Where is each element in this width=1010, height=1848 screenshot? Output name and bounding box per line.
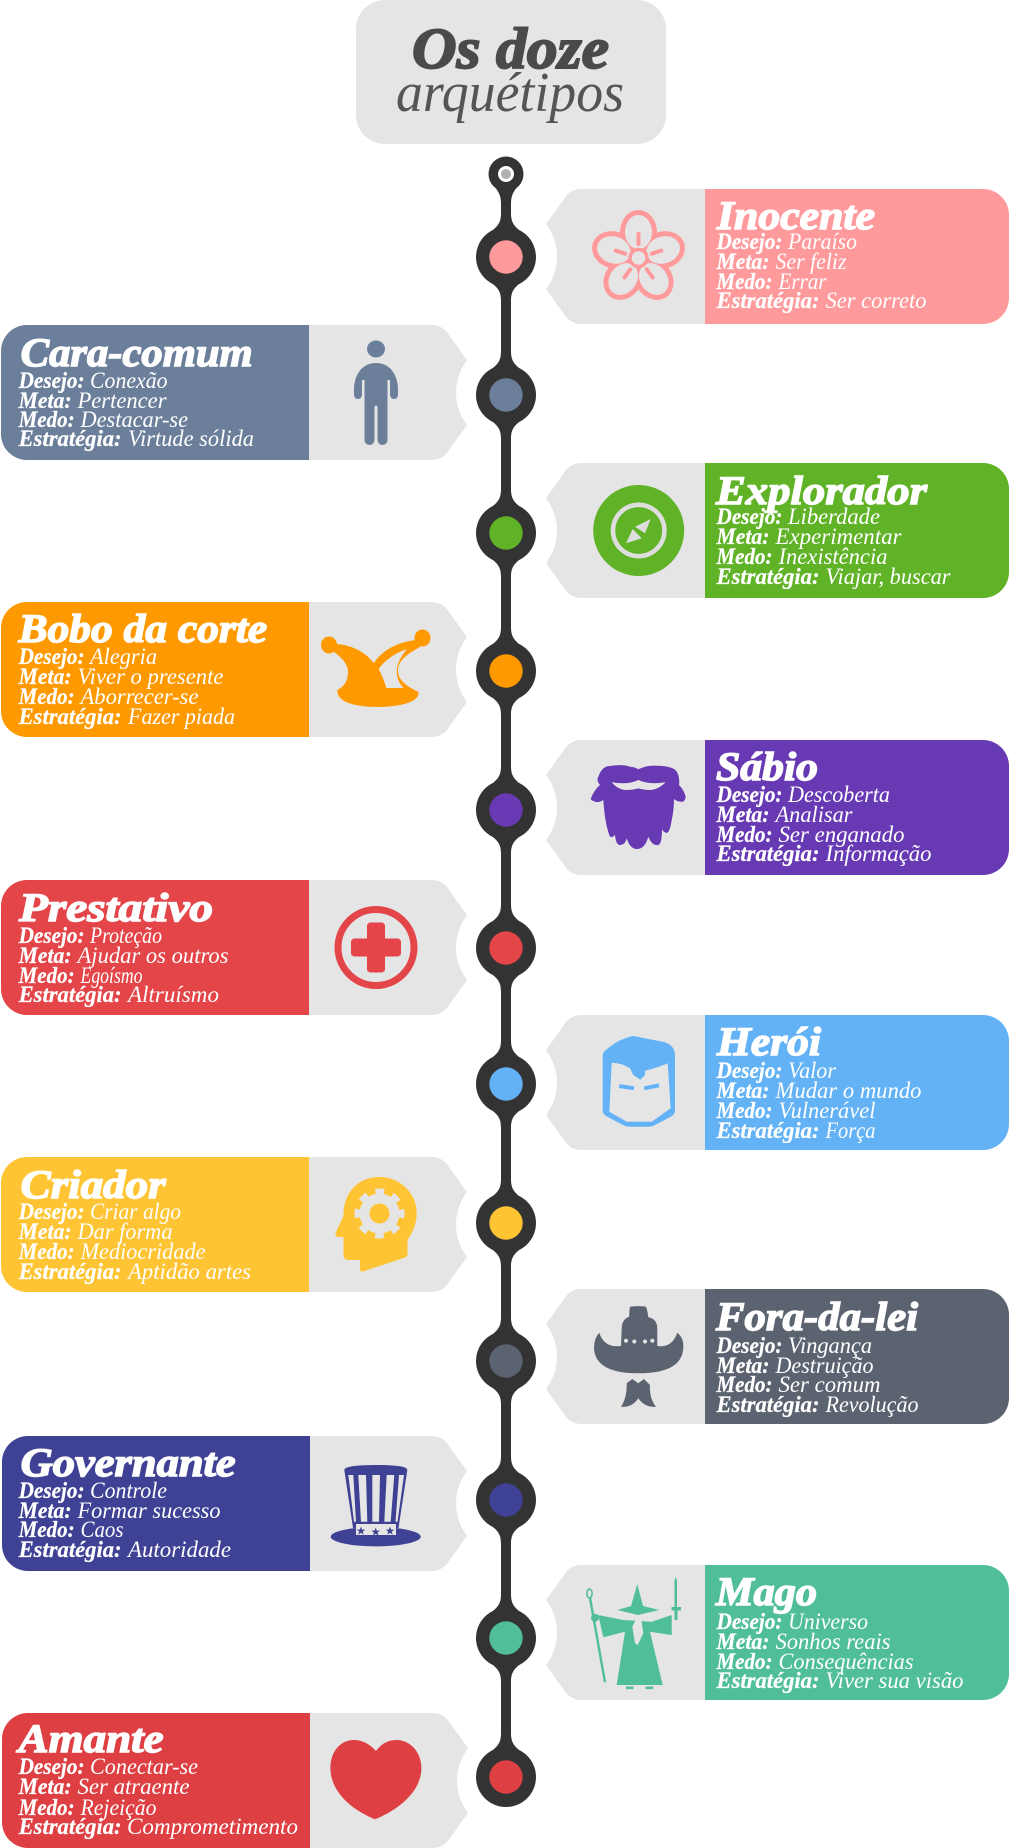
details: Prestativo: Meta: xyxy=(18,943,72,969)
details: Amante: Comprometimento xyxy=(127,1814,298,1840)
details: Inocente: Estratégia: xyxy=(716,288,820,314)
details: Criador: Dar forma xyxy=(77,1219,172,1245)
details: Amante: Rejeição xyxy=(80,1795,157,1821)
details: Amante: Meta: xyxy=(18,1774,72,1800)
details: Herói: Meta: xyxy=(716,1078,770,1104)
details: Governante: Autoridade xyxy=(126,1537,231,1563)
details: Fora-da-lei: Ser comum xyxy=(778,1372,880,1398)
heading: Governante: Governante xyxy=(21,1440,236,1485)
panel: Herói xyxy=(546,1015,1009,1150)
details: Fora-da-lei xyxy=(716,1333,919,1418)
details: Criador: Mediocridade xyxy=(80,1239,206,1265)
title xyxy=(356,0,666,144)
icon: head with gear xyxy=(335,1177,417,1272)
icon: medical cross xyxy=(338,910,414,986)
node: Sábio xyxy=(476,766,536,854)
details: Prestativo: Medo: xyxy=(18,963,75,989)
details: Bobo da corte: Alegria xyxy=(88,644,157,670)
title: arquétipos xyxy=(396,62,624,124)
node: Prestativo xyxy=(476,904,536,992)
details: Prestativo: Ajudar os outros xyxy=(76,943,228,969)
panel: Bobo da corte xyxy=(1,602,467,737)
details: Fora-da-lei: Desejo: xyxy=(716,1333,782,1359)
icon: top hat xyxy=(331,1465,421,1546)
details: Sábio: Meta: xyxy=(716,802,770,828)
details: Herói: Vulnerável xyxy=(778,1098,876,1124)
details: Criador: Estratégia: xyxy=(18,1259,122,1285)
heading: Amante: Amante xyxy=(15,1716,164,1761)
details: Sábio: Estratégia: xyxy=(716,841,820,867)
panel: Governante xyxy=(2,1436,467,1571)
details: Herói xyxy=(716,1058,922,1144)
details: Mago: Medo: xyxy=(716,1649,772,1675)
details: Inocente: Desejo: xyxy=(716,229,782,255)
details: Criador: Criar algo xyxy=(90,1199,181,1225)
details: Bobo da corte: Desejo: xyxy=(18,644,85,670)
details: Criador: Desejo: xyxy=(18,1199,85,1225)
node: Herói xyxy=(476,1040,536,1128)
details: Explorador: Experimentar xyxy=(775,524,902,550)
details: Explorador: Inexistência xyxy=(778,544,888,570)
details: Sábio xyxy=(716,782,932,867)
details: Mago: Estratégia: xyxy=(716,1668,820,1694)
details: Fora-da-lei: Destruição xyxy=(775,1353,874,1379)
heading: Sábio: Sábio xyxy=(716,744,818,789)
details: Mago: Viver sua visão xyxy=(826,1668,964,1694)
details: Sábio: Medo: xyxy=(716,822,772,848)
panel: Mago xyxy=(546,1565,1009,1700)
details: Amante: Desejo: xyxy=(18,1754,85,1780)
details: Sábio: Desejo: xyxy=(716,782,782,808)
details: Governante: Medo: xyxy=(18,1517,75,1543)
details: Inocente: Paraíso xyxy=(787,229,857,255)
node: Cara-comum xyxy=(476,351,536,439)
heading: Criador: Criador xyxy=(21,1162,166,1207)
details: Explorador: Meta: xyxy=(716,524,770,550)
details: Prestativo: Proteção xyxy=(89,923,162,949)
details: Bobo da corte: Estratégia: xyxy=(18,704,122,730)
icon: flower xyxy=(587,210,690,308)
panel: Explorador xyxy=(546,463,1009,598)
details: Fora-da-lei: Estratégia: xyxy=(716,1392,820,1418)
details: Prestativo: Estratégia: xyxy=(18,982,122,1008)
icon: jester hat xyxy=(321,630,430,707)
heading: Bobo da corte: Bobo da corte xyxy=(18,606,267,651)
details: Herói: Força xyxy=(825,1118,876,1144)
panel: Fora-da-lei xyxy=(546,1289,1009,1424)
details: Herói: Mudar o mundo xyxy=(775,1078,922,1104)
details: Sábio: Analisar xyxy=(774,802,853,828)
details: Amante: Estratégia: xyxy=(18,1814,122,1840)
details: Herói: Estratégia: xyxy=(716,1118,820,1144)
node: Mago xyxy=(476,1594,536,1682)
details: Mago: Consequências xyxy=(778,1649,914,1675)
icon: compass xyxy=(593,485,684,576)
details: Governante: Controle xyxy=(90,1478,167,1504)
heading: Explorador: Explorador xyxy=(715,468,927,513)
start node xyxy=(488,156,524,204)
details: Bobo da corte xyxy=(18,644,235,730)
icon: cowboy hat and moustache xyxy=(594,1306,683,1407)
details: Cara-comum: Virtude sólida xyxy=(128,426,254,452)
details: Fora-da-lei: Meta: xyxy=(716,1353,770,1379)
details: Cara-comum: Medo: xyxy=(18,407,75,433)
details: Criador: Aptidão artes xyxy=(126,1259,251,1285)
details: Herói: Valor xyxy=(788,1058,837,1084)
details: Mago: Universo xyxy=(788,1609,868,1635)
panel: Sábio xyxy=(546,740,1009,875)
details: Governante: Meta: xyxy=(18,1498,72,1524)
details: Cara-comum: Estratégia: xyxy=(18,426,122,452)
icon: beard xyxy=(591,765,686,849)
details: Mago: Sonhos reais xyxy=(776,1629,890,1655)
details: Amante: Ser atraente xyxy=(78,1774,190,1800)
details: Amante xyxy=(18,1754,298,1840)
details: Cara-comum: Pertencer xyxy=(77,388,167,414)
details: Governante: Desejo: xyxy=(18,1478,85,1504)
details: Mago: Desejo: xyxy=(716,1609,782,1635)
details: Cara-comum xyxy=(18,368,254,452)
details: Herói: Medo: xyxy=(716,1098,772,1124)
details: Cara-comum: Meta: xyxy=(18,388,72,414)
node: Criador xyxy=(476,1179,536,1267)
details: Criador: Medo: xyxy=(18,1239,75,1265)
node: Governante xyxy=(476,1456,536,1544)
details: Criador xyxy=(18,1199,251,1285)
details: Cara-comum: Destacar-se xyxy=(80,407,188,433)
details: Explorador xyxy=(716,504,951,590)
panel: Criador xyxy=(1,1157,467,1292)
node: Fora-da-lei xyxy=(476,1317,536,1405)
details: Herói: Desejo: xyxy=(716,1058,782,1084)
heading: Prestativo: Prestativo xyxy=(18,885,213,930)
timeline xyxy=(476,156,536,1807)
details: Explorador: Medo: xyxy=(716,544,772,570)
details: Mago: Meta: xyxy=(716,1629,770,1655)
details: Mago xyxy=(716,1609,964,1694)
panel: Inocente xyxy=(546,189,1009,324)
heading: Fora-da-lei: Fora-da-lei xyxy=(715,1294,918,1339)
icon: heart xyxy=(330,1740,421,1819)
details: Explorador: Desejo: xyxy=(716,504,782,530)
details: Prestativo: Desejo: xyxy=(18,923,85,949)
heading: Inocente: Inocente xyxy=(716,193,875,238)
heading: Cara-comum: Cara-comum xyxy=(21,330,253,375)
details: Bobo da corte: Medo: xyxy=(18,684,75,710)
details: Prestativo xyxy=(18,923,229,1008)
node: Amante xyxy=(476,1733,536,1807)
panel: Cara-comum xyxy=(1,325,467,460)
details: Governante xyxy=(18,1478,231,1563)
details: Criador: Meta: xyxy=(18,1219,72,1245)
node: Bobo da corte xyxy=(476,627,536,715)
details: Cara-comum: Desejo: xyxy=(18,368,85,394)
details: Prestativo: Altruísmo xyxy=(126,982,219,1008)
details: Governante: Formar sucesso xyxy=(77,1498,221,1524)
details: Sábio: Ser enganado xyxy=(778,822,905,848)
node: Inocente xyxy=(476,213,536,301)
details: Bobo da corte: Meta: xyxy=(18,664,72,690)
details: Amante: Conectar-se xyxy=(90,1754,198,1780)
icon: hero mask xyxy=(603,1036,675,1127)
details: Bobo da corte: Fazer piada xyxy=(127,704,235,730)
details: Inocente: Meta: xyxy=(716,249,770,275)
details: Governante: Estratégia: xyxy=(18,1537,122,1563)
details: Explorador: Viajar, buscar xyxy=(826,564,951,590)
details: Inocente: Ser correto xyxy=(826,288,927,314)
details: Amante: Medo: xyxy=(18,1795,75,1821)
details: Cara-comum: Conexão xyxy=(90,368,168,394)
node: Explorador xyxy=(476,489,536,577)
details: Inocente: Medo: xyxy=(716,269,772,295)
details: Explorador: Liberdade xyxy=(787,504,880,530)
details: Inocente: Ser feliz xyxy=(776,249,846,275)
details: Fora-da-lei: Revolução xyxy=(825,1392,919,1418)
heading: Herói: Herói xyxy=(716,1019,821,1064)
details: Explorador: Estratégia: xyxy=(716,564,820,590)
details: Sábio: Informação xyxy=(825,841,932,867)
heading: Mago: Mago xyxy=(715,1569,817,1614)
details: Inocente: Errar xyxy=(778,269,827,295)
details: Fora-da-lei: Medo: xyxy=(716,1372,772,1398)
details: Bobo da corte: Viver o presente xyxy=(78,664,224,690)
title: Os doze xyxy=(412,16,609,81)
details: Bobo da corte: Aborrecer-se xyxy=(79,684,198,710)
details: Inocente xyxy=(716,229,927,314)
icon: person xyxy=(354,340,398,445)
panel: Amante xyxy=(2,1713,468,1848)
details: Governante: Caos xyxy=(80,1517,124,1543)
details: Fora-da-lei: Vingança xyxy=(788,1333,872,1359)
panel: Prestativo xyxy=(1,880,467,1015)
icon: wizard xyxy=(587,1577,681,1689)
details: Sábio: Descoberta xyxy=(787,782,890,808)
details: Prestativo: Egoísmo xyxy=(80,963,143,989)
